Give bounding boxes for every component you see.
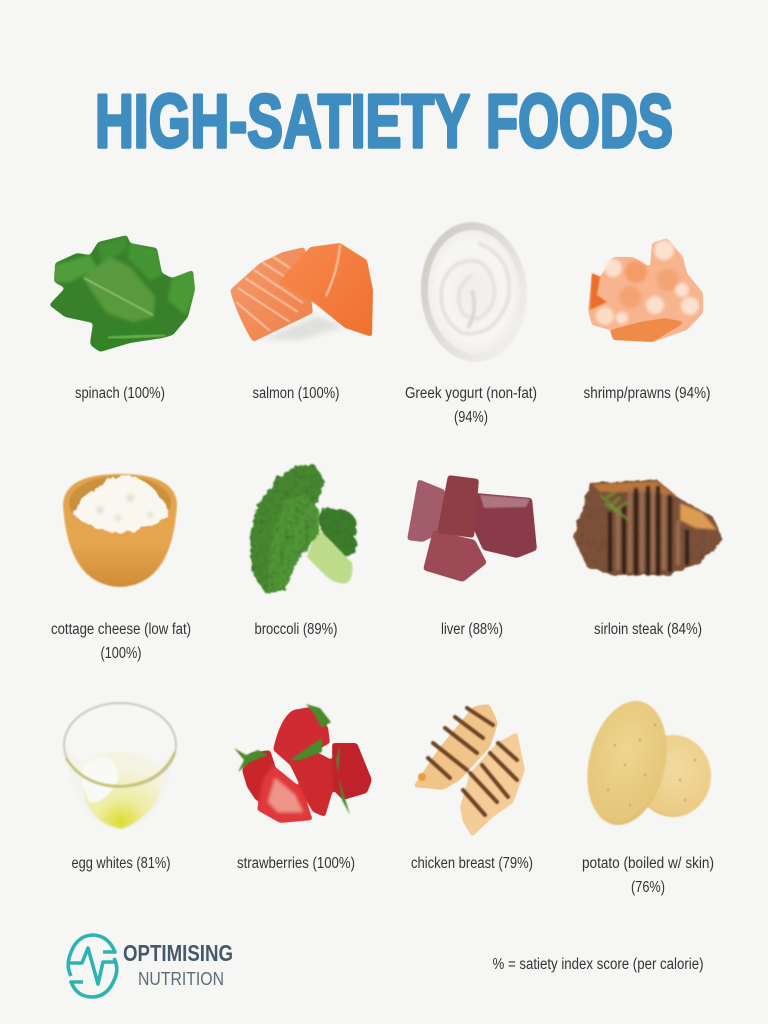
label: chicken breast: chicken breast (79%) xyxy=(411,855,533,872)
label: liver: liver (88%) xyxy=(441,621,503,638)
icon: broccoli xyxy=(250,465,357,593)
label: salmon: salmon (100%) xyxy=(252,385,340,402)
label: spinach: spinach (100%) xyxy=(75,385,165,402)
label: cottage cheese: (100%) xyxy=(100,645,142,662)
food item: sirloin steak xyxy=(573,480,723,638)
food item: cottage cheese xyxy=(51,474,191,662)
title: FOODS xyxy=(486,79,673,163)
food item: Greek yogurt xyxy=(405,218,537,426)
food item: potato xyxy=(576,693,714,896)
label: shrimp: shrimp/prawns (94%) xyxy=(584,385,710,402)
icon: chicken breast xyxy=(413,704,525,837)
food item: shrimp xyxy=(584,238,710,402)
icon: cottage cheese bowl xyxy=(63,474,177,587)
icon: salmon xyxy=(230,243,373,342)
food item: salmon xyxy=(230,243,373,402)
food item: chicken breast xyxy=(411,704,533,872)
label: sirloin steak: sirloin steak (84%) xyxy=(594,621,702,638)
label: broccoli: broccoli (89%) xyxy=(254,621,338,638)
icon: spinach xyxy=(49,235,195,352)
footnote: % = satiety index score (per calorie) xyxy=(492,956,704,973)
food item: strawberries xyxy=(234,704,372,872)
food item: spinach xyxy=(49,235,195,402)
logo subtext: NUTRITION xyxy=(138,969,224,989)
label: potato: potato (boiled w/ skin) xyxy=(582,855,714,872)
logo: Optimising Nutrition xyxy=(68,935,233,997)
logo text: OPTIMISING xyxy=(123,940,233,966)
title: HIGH-SATIETY xyxy=(95,79,469,163)
label: strawberries: strawberries (100%) xyxy=(237,855,355,872)
icon: egg white glass bowl xyxy=(64,703,176,829)
label: egg whites: egg whites (81%) xyxy=(72,855,170,872)
label: potato: (76%) xyxy=(631,879,665,896)
food item: liver xyxy=(407,475,537,638)
icon: logo mark xyxy=(68,935,117,997)
label: cottage cheese: cottage cheese (low fat) xyxy=(51,621,191,638)
icon: shrimp xyxy=(588,238,703,342)
food item: broccoli xyxy=(250,465,357,638)
label: Greek yogurt: (94%) xyxy=(454,409,488,426)
food item: egg whites xyxy=(64,703,176,872)
icon: steak xyxy=(573,480,723,575)
icon: potatoes xyxy=(576,693,711,833)
icon: yogurt bowl xyxy=(416,218,532,366)
label: Greek yogurt: Greek yogurt (non-fat) xyxy=(405,385,537,402)
icon: liver xyxy=(407,475,537,582)
icon: strawberries xyxy=(234,704,372,823)
